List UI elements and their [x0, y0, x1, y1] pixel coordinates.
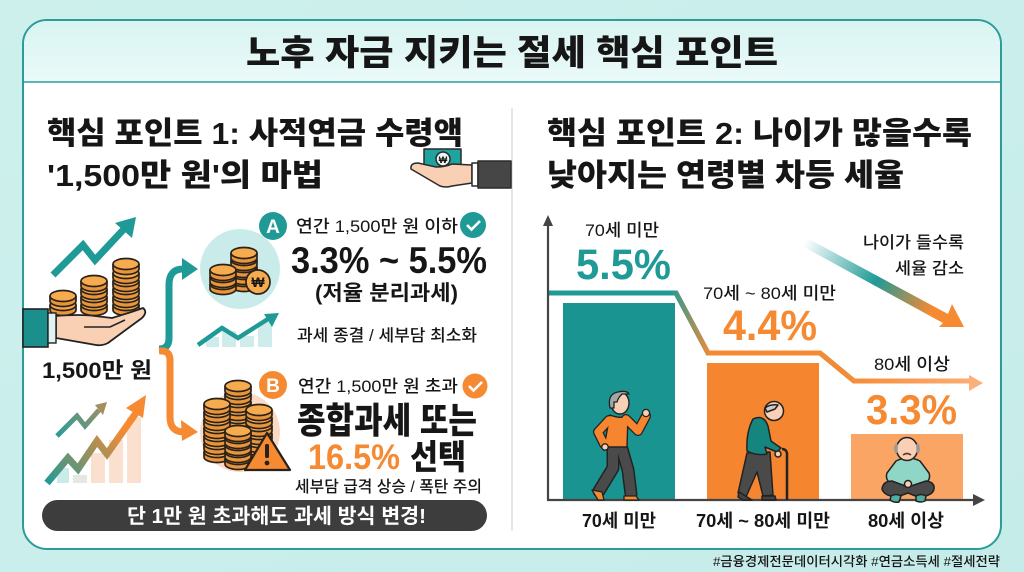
arrow: decreasing [802, 238, 964, 327]
heading: point 2 [547, 116, 972, 193]
arrow: rising teal [53, 217, 136, 275]
text: rate falls with age [863, 233, 964, 278]
icon: coins with warning [200, 380, 290, 472]
text: A result: 과세 종결 / 세부담 최소화 [297, 326, 477, 345]
label: under 70 top: 70세 미만 [585, 221, 659, 240]
icon: hand holding money [411, 149, 511, 188]
badge A [259, 212, 287, 240]
axis label: 70 to 80: 70세 ~ 80세 미만 [696, 511, 830, 531]
callout pill [42, 500, 487, 531]
label: 70 to 80 top: 70세 ~ 80세 미만 [703, 284, 836, 303]
icon: warning triangle [245, 433, 290, 470]
label: over 80 top: 80세 이상 [874, 355, 950, 374]
step line with arrow [549, 293, 983, 391]
badge B [259, 371, 287, 399]
bar: under 70 [563, 303, 675, 500]
bar: over 80 [851, 434, 963, 500]
value: 4.4%: 4.4% [723, 302, 817, 350]
text: A low separate tax: (저율 분리과세) [315, 282, 458, 305]
icon: orange check [462, 374, 488, 398]
text: B warning: 세부담 급격 상승 / 폭탄 주의 [295, 478, 482, 496]
axes [543, 215, 985, 506]
heading: point 1 [47, 116, 463, 193]
callout pill: 단 1만 원 초과해도 과세 방식 변경! [127, 505, 426, 528]
bar: 70 to 80 [707, 363, 819, 500]
icon: mini teal chart [198, 313, 279, 347]
text: rate falls with age: 세율 감소 [895, 259, 964, 278]
icon: seated senior [882, 438, 934, 502]
arrow: branch to A [159, 258, 198, 349]
heading: point 2: 낮아지는 연령별 차등 세율 [547, 158, 904, 193]
badge B: B [266, 376, 280, 397]
axis label: under 70: 70세 미만 [582, 511, 656, 531]
heading: point 1: 핵심 포인트 1: 사적연금 수령액 [47, 116, 463, 151]
icon: coins in teal circle: ₩ [251, 274, 265, 290]
text: B 16.5% rate [308, 438, 466, 477]
header band [24, 21, 1000, 82]
value: 3.3%: 3.3% [866, 386, 957, 433]
icon: walking senior [592, 391, 650, 500]
text: B 16.5% rate: 선택 [410, 439, 466, 477]
icon: coins on hand with rising arrow [23, 217, 145, 347]
axis label: over 80: 80세 이상 [868, 511, 944, 531]
heading: point 2: 핵심 포인트 2: 나이가 많을수록 [547, 116, 972, 151]
text: B comprehensive tax: 종합과세 또는 [297, 400, 477, 441]
icon: senior with cane [738, 402, 787, 500]
icon: rising chart orange [47, 395, 146, 483]
icon: hand holding money: ₩ [439, 155, 448, 165]
text: A rate: 3.3% ~ 5.5% [291, 240, 487, 281]
hashtags: #금융경제전문데이터시각화 #연금소득세 #절세전략 [713, 554, 1000, 569]
heading: point 1: '1,500만 원'의 마법 [47, 158, 323, 193]
value: 5.5%: 5.5% [576, 241, 671, 289]
text: A condition: 연간 1,500만 원 이하 [296, 217, 458, 236]
arrow: branch to B [159, 351, 198, 441]
label: 1,500만 원: 1,500만 원 [42, 358, 152, 383]
icon: teal check [460, 212, 486, 238]
icon: coins in teal circle [200, 229, 280, 309]
text: rate falls with age: 나이가 들수록 [863, 233, 964, 252]
text: B condition: 연간 1,500만 원 초과 [298, 377, 458, 396]
title: 노후 자금 지키는 절세 핵심 포인트 [246, 34, 778, 73]
badge A: A [266, 217, 280, 238]
bar chart [543, 215, 985, 531]
text: B 16.5% rate: 16.5% [308, 438, 400, 477]
